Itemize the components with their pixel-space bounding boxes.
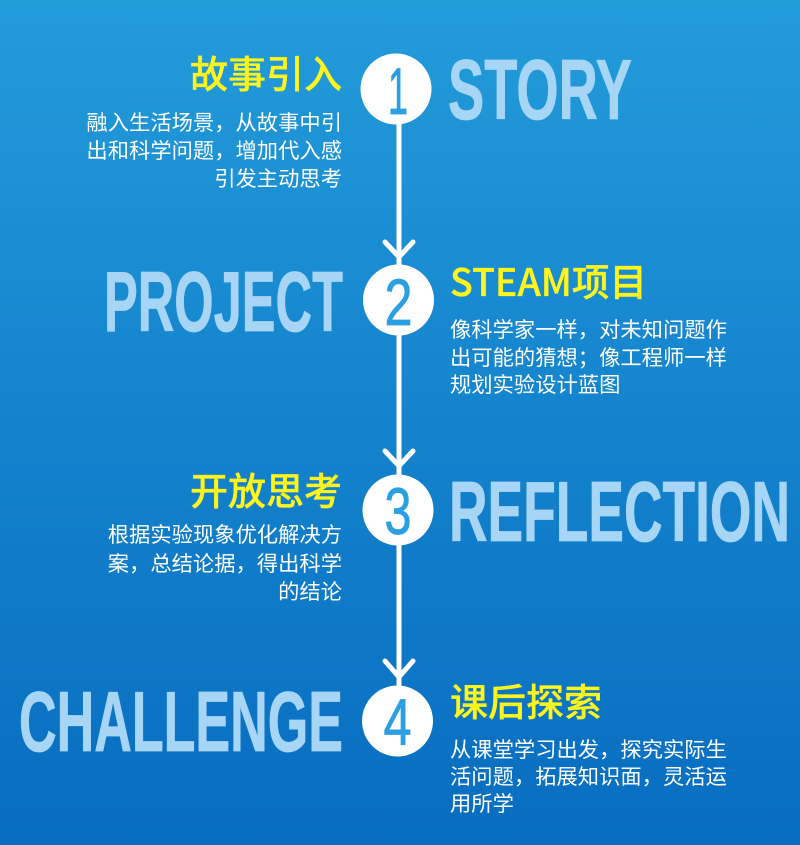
- step 3: reflection: [108, 461, 790, 604]
- text: project description: 规划实验设计蓝图: [450, 373, 620, 397]
- word: CHALLENGE: CHALLENGE: [19, 675, 343, 770]
- text: reflection description: 根据实验现象优化解决方: [108, 523, 342, 547]
- text: project description: 像科学家一样，对未知问题作: [450, 318, 727, 342]
- circle 3: 3: [384, 474, 412, 548]
- heading: 开放思考: 开放思考: [190, 461, 342, 516]
- heading: 课后探索: 课后探索: [450, 672, 602, 727]
- text: challenge description: 活问题，拓展知识面，灵活运: [450, 765, 727, 789]
- circle 2: 2: [384, 265, 412, 339]
- text: project description: [450, 318, 727, 397]
- text: story description: 出和科学问题，增加代入感: [86, 139, 342, 163]
- text: project description: 出可能的猜想；像工程师一样: [450, 346, 727, 370]
- heading: 故事引入: 故事引入: [190, 44, 342, 99]
- text: challenge description: 用所学: [450, 792, 514, 816]
- text: story description: [86, 111, 342, 191]
- word: STORY: STORY: [448, 43, 632, 138]
- timeline arrows: [385, 120, 413, 690]
- text: reflection description: 案，总结论据，得出科学: [108, 552, 342, 576]
- text: reflection description: [108, 523, 342, 604]
- circle 4: 4: [384, 685, 412, 759]
- text: challenge description: [450, 738, 727, 816]
- step 1: story: [86, 43, 632, 191]
- circle 1: 1: [388, 54, 408, 128]
- circle 3: [362, 474, 434, 548]
- text: reflection description: 的结论: [278, 580, 342, 604]
- word: PROJECT: PROJECT: [104, 255, 343, 350]
- circle 1: [360, 54, 432, 128]
- text: challenge description: 从课堂学习出发，探究实际生: [450, 738, 727, 762]
- circle 4: [362, 685, 433, 759]
- text: story description: 融入生活场景，从故事中引: [86, 111, 342, 135]
- circle 2: [363, 264, 434, 339]
- text: story description: 引发主动思考: [214, 167, 342, 191]
- step 2: project: [104, 252, 727, 397]
- step 4: challenge: [19, 672, 727, 816]
- heading: STEAM项目: STEAM项目: [450, 252, 647, 307]
